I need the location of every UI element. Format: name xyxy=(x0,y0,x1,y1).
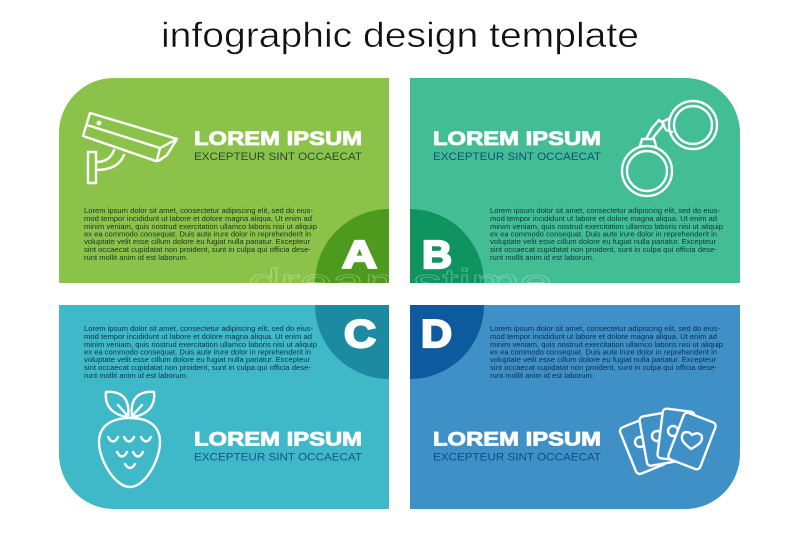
icon: handcuffs xyxy=(622,101,717,196)
body text: C: mod tempor incididunt ut labore et dolore magna aliqua. Ut enim ad xyxy=(84,333,312,341)
body text: D: runt mollit anim id est laborum. xyxy=(490,372,594,380)
watermark: dreamstime xyxy=(248,261,552,302)
body text: A: runt mollit anim id est laborum. xyxy=(84,254,188,262)
body text: A xyxy=(84,207,317,262)
body text: B: mod tempor incididunt ut labore et dolore magna aliqua. Ut enim ad xyxy=(490,215,717,223)
heading: B: LOREM IPSUM xyxy=(433,128,601,150)
badge: D: D xyxy=(421,313,452,356)
heading: C: LOREM IPSUM xyxy=(194,428,362,450)
body text: B: runt mollit anim id est laborum. xyxy=(490,254,594,262)
body text: D: ex ea commodo consequat. Duis aute irure dolor in reprehenderit in xyxy=(490,348,717,356)
subheading: B: EXCEPTEUR SINT OCCAECAT xyxy=(433,151,601,163)
body text: C: Lorem ipsum dolor sit amet, consectetur adipiscing elit, sed do eius- xyxy=(84,325,314,333)
title: infographic design template xyxy=(161,16,639,55)
badge: B xyxy=(410,209,484,283)
icon: strawberry xyxy=(99,392,160,487)
body text: A: ex ea commodo consequat. Duis aute irure dolor in reprehenderit in xyxy=(84,230,311,238)
body text: B: sint occaecat cupidatat non proident, sunt in culpa qui officia dese- xyxy=(490,246,718,254)
body text: C: runt mollit anim id est laborum. xyxy=(84,372,188,380)
panel: B xyxy=(410,78,740,283)
badge: B: B xyxy=(422,234,452,277)
body text: C: ex ea commodo consequat. Duis aute irure dolor in reprehenderit in xyxy=(84,348,311,356)
body text: A: voluptate velit esse cillum dolore eu fugiat nulla pariatur. Excepteur xyxy=(84,238,311,246)
panel: C xyxy=(59,305,389,509)
body text: C xyxy=(84,325,317,380)
body text: C: sint occaecat cupidatat non proident, sunt in culpa qui officia dese- xyxy=(84,364,312,372)
body text: B: voluptate velit esse cillum dolore eu fugiat nulla pariatur. Excepteur xyxy=(490,238,717,246)
badge: A xyxy=(315,209,389,283)
body text: D: sint occaecat cupidatat non proident, sunt in culpa qui officia dese- xyxy=(490,364,718,372)
body text: B xyxy=(490,207,723,262)
body text: C: minim veniam, quis nostrud exercitation ullamco laboris nisi ut aliquip xyxy=(84,341,317,349)
body text: A: mod tempor incididunt ut labore et dolore magna aliqua. Ut enim ad xyxy=(84,215,312,223)
badge: C: C xyxy=(344,313,376,356)
body text: A: sint occaecat cupidatat non proident, sunt in culpa qui officia dese- xyxy=(84,246,312,254)
body text: C: voluptate velit esse cillum dolore eu fugiat nulla pariatur. Excepteur xyxy=(84,356,311,364)
body text: D: voluptate velit esse cillum dolore eu fugiat nulla pariatur. Excepteur xyxy=(490,356,717,364)
heading: D: LOREM IPSUM xyxy=(433,428,601,450)
badge: C xyxy=(315,305,389,379)
panel: D xyxy=(410,305,740,509)
body text: D: mod tempor incididunt ut labore et dolore magna aliqua. Ut enim ad xyxy=(490,333,717,341)
body text: D: minim veniam, quis nostrud exercitation ullamco laboris nisi ut aliquip xyxy=(490,341,723,349)
panel: A xyxy=(59,78,389,283)
subheading: D: EXCEPTEUR SINT OCCAECAT xyxy=(433,452,601,464)
body text: A: minim veniam, quis nostrud exercitation ullamco laboris nisi ut aliquip xyxy=(84,223,317,231)
body text: D: Lorem ipsum dolor sit amet, consectetur adipiscing elit, sed do eius- xyxy=(490,325,721,333)
body text: B: Lorem ipsum dolor sit amet, consectetur adipiscing elit, sed do eius- xyxy=(490,207,721,215)
subheading: C: EXCEPTEUR SINT OCCAECAT xyxy=(194,452,362,464)
heading: A: LOREM IPSUM xyxy=(194,128,362,150)
icon: playing cards xyxy=(619,408,717,475)
subheading: A: EXCEPTEUR SINT OCCAECAT xyxy=(194,151,362,163)
body text: A: Lorem ipsum dolor sit amet, consectetur adipiscing elit, sed do eius- xyxy=(84,207,314,215)
icon: security camera xyxy=(83,113,177,183)
body text: B: minim veniam, quis nostrud exercitation ullamco laboris nisi ut aliquip xyxy=(490,223,723,231)
body text: B: ex ea commodo consequat. Duis aute irure dolor in reprehenderit in xyxy=(490,230,717,238)
body text: D xyxy=(490,325,723,380)
badge: D xyxy=(410,305,484,379)
badge: A: A xyxy=(342,234,377,277)
